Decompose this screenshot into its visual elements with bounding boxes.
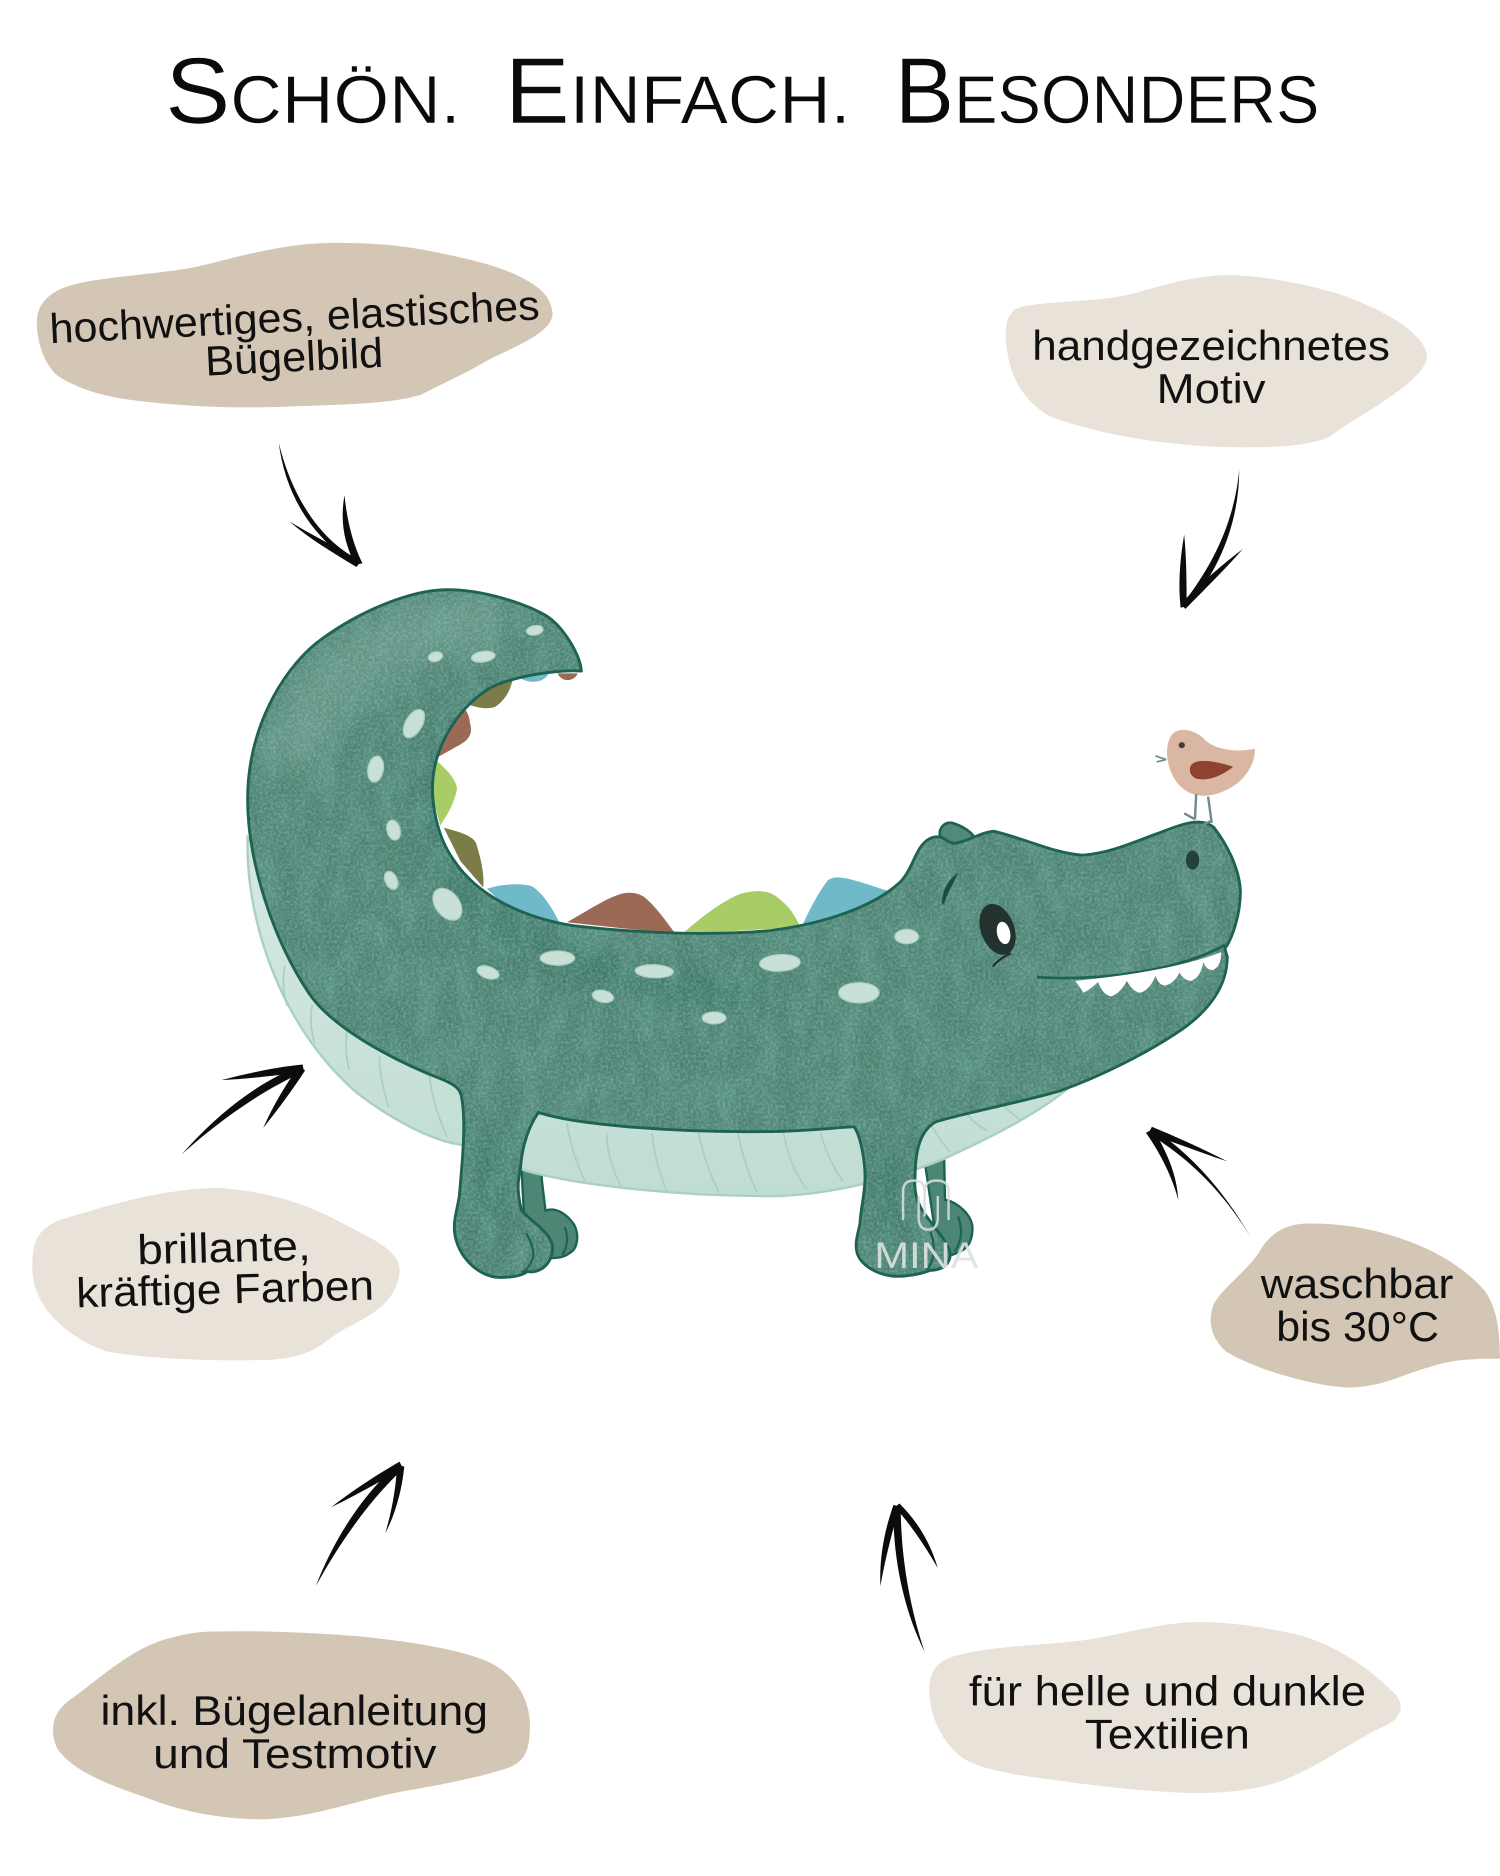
callout: waschbar bis 30°C (1211, 1224, 1500, 1388)
belly ribs (283, 965, 1020, 1193)
callout: brillante, kräftige Farben: brillante, (137, 1222, 311, 1273)
callout: für helle und dunkle Textilien: Textilien (1085, 1711, 1250, 1758)
arrow: right to jaw (1146, 1127, 1251, 1238)
arrow: bottom left (316, 1462, 404, 1586)
ear (940, 823, 974, 847)
callout: brillante, kräftige Farben: kräftige Farben (76, 1262, 375, 1316)
callout: für helle und dunkle Textilien (929, 1622, 1401, 1793)
body (248, 590, 1240, 1277)
mouth line (1037, 945, 1225, 978)
callout: inkl. Bügelanleitung und Testmotiv: und Testmotiv (153, 1730, 437, 1777)
teeth (1075, 952, 1221, 996)
watermark logo (874, 1181, 979, 1276)
eye (973, 899, 1022, 966)
far hind leg and foot (520, 1148, 577, 1258)
body outline (248, 590, 1240, 1277)
toe lines (522, 1216, 961, 1273)
callout: hochwertiges, elastisches Bügelbild: Bügelbild (204, 329, 384, 385)
title (165, 39, 1319, 143)
bird (1155, 730, 1255, 825)
spines behind the back (431, 672, 892, 934)
callout: hochwertiges, elastisches Bügelbild: hochwertiges, elastisches (48, 281, 541, 352)
arrow: top left to tail (279, 443, 362, 567)
callout: hochwertiges, elastisches Bügelbild (37, 243, 553, 407)
arrow: left to belly (182, 1065, 305, 1154)
callout: waschbar bis 30°C: waschbar (1260, 1260, 1453, 1307)
spots (366, 624, 919, 1024)
title: EINFACH. (505, 39, 850, 143)
callout: handgezeichnetes Motiv: Motiv (1157, 365, 1266, 412)
arrow: top right to bird (1179, 470, 1243, 609)
arrow: bottom right (880, 1504, 938, 1652)
title: SCHÖN. (165, 39, 461, 143)
callout: handgezeichnetes Motiv (1006, 275, 1427, 447)
title: BESONDERS (895, 39, 1319, 143)
nostril (1186, 850, 1199, 870)
belly (248, 837, 1071, 1196)
crocodile illustration (239, 580, 1255, 1286)
callout: für helle und dunkle Textilien: für helle und dunkle (969, 1668, 1366, 1715)
watermark logo: MINA (874, 1234, 979, 1276)
watercolor shading (239, 580, 1250, 1286)
callout: waschbar bis 30°C: bis 30°C (1276, 1303, 1439, 1350)
callout: inkl. Bügelanleitung und Testmotiv: inkl. Bügelanleitung (101, 1687, 488, 1734)
callout: handgezeichnetes Motiv: handgezeichnetes (1032, 322, 1390, 369)
callout: brillante, kräftige Farben (32, 1188, 400, 1360)
callout: inkl. Bügelanleitung und Testmotiv (53, 1631, 530, 1819)
brow (943, 874, 957, 903)
far front leg and foot (921, 1136, 972, 1258)
